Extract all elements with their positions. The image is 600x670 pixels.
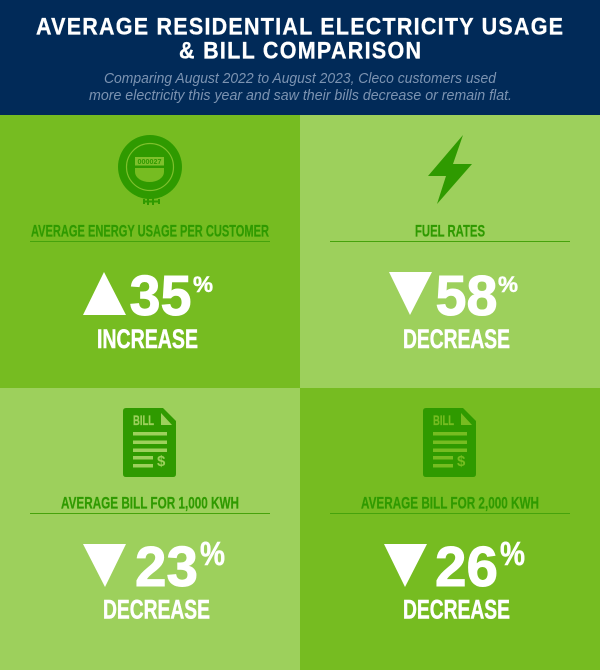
subtitle [89,70,512,104]
label: DECREASE [403,594,510,624]
panel: average energy usage [0,115,300,388]
value: 26 [435,535,498,599]
icon: bill [423,408,476,477]
percent sign: % [498,272,518,297]
value: 35 [130,264,192,328]
label: INCREASE [97,324,198,354]
icon: electric meter [118,135,182,205]
heading: AVERAGE ENERGY USAGE PER CUSTOMER [31,222,269,240]
header band [0,0,600,115]
value: 23 [135,535,198,599]
down triangle [389,272,432,315]
icon: bill: BILL [133,412,154,428]
icon: bill [123,408,176,477]
subtitle: Comparing August 2022 to August 2023, Cleco customers used [104,70,497,87]
icon: bill: $ [157,453,166,470]
value: 58 [436,264,498,328]
heading: AVERAGE BILL FOR 1,000 KWH [61,494,239,512]
subtitle: more electricity this year and saw their bills decrease or remain flat. [89,87,512,104]
panel: bill 2000 [300,388,600,670]
icon: electric meter: 000027 [138,159,162,166]
heading: FUEL RATES [415,222,485,240]
title: AVERAGE RESIDENTIAL ELECTRICITY USAGE [36,12,563,40]
icon: bill: BILL [433,412,454,428]
up triangle [83,272,126,315]
title: & BILL COMPARISON [179,36,421,64]
title [36,12,563,64]
down triangle [83,544,126,587]
icon: bill: $ [457,453,466,470]
label: DECREASE [103,594,210,624]
label: DECREASE [403,324,510,354]
percent sign: % [193,272,213,297]
icon: lightning bolt [428,135,472,204]
panel: fuel rates [300,115,600,388]
panel: bill 1000 [0,388,300,670]
percent sign: % [200,535,225,572]
down triangle [384,544,427,587]
percent sign: % [500,535,525,572]
